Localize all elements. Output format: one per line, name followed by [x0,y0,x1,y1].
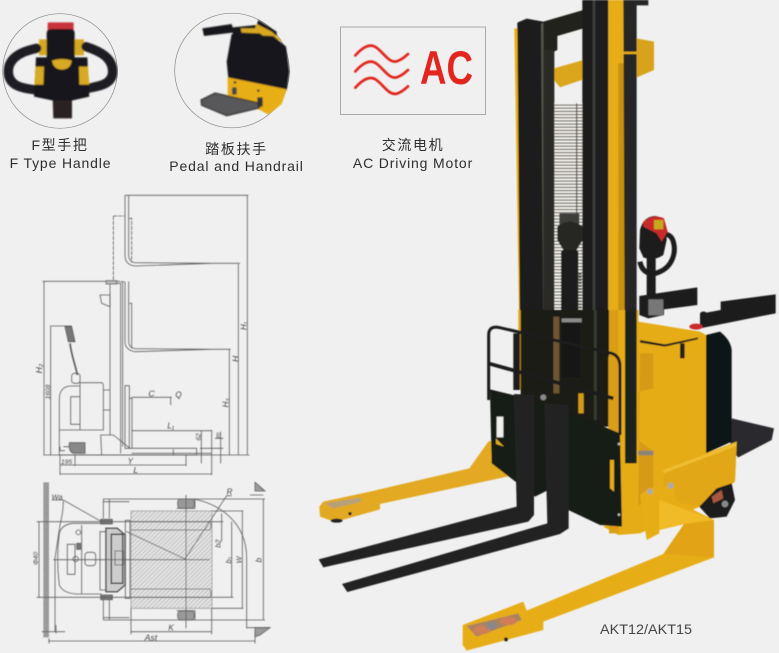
lower chassis, forks and legs [319,310,774,651]
yellow body [603,310,737,535]
near leg [463,486,714,651]
chart: side elevation technical drawing: 1608 [45,384,52,399]
chart: side elevation technical drawing: 62 [196,433,203,441]
chart: top view technical drawing: Ast [144,633,158,643]
chart: side elevation technical drawing: L [133,465,138,475]
label: F type handle: F Type Handle [10,155,111,171]
chart: side elevation technical drawing [34,195,249,475]
label: pedal and handrail [169,141,304,174]
chart: side elevation technical drawing: H [230,355,240,362]
chart: side elevation technical drawing: H₂ [34,363,44,373]
label: pedal and handrail: Pedal and Handrail [169,158,304,174]
illustration: electric stacker photo [319,0,776,651]
chart: top view technical drawing: R [227,487,233,496]
battery cover [706,332,732,453]
chart: top view technical drawing [33,482,270,643]
label: F type handle: F型手把 [32,137,88,153]
model label: AKT12/AKT15 [600,621,692,637]
chart: top view technical drawing: K [168,623,174,632]
icon: pedal and handrail photo [201,20,289,116]
far leg [319,437,510,522]
load rollers [467,613,522,637]
fork two [342,403,569,592]
chart: side elevation technical drawing: m [215,432,222,438]
panel: F type handle [3,14,117,171]
chart: side elevation technical drawing: Y [128,457,134,466]
drive wheel [699,483,735,518]
upper mast [514,0,776,333]
chart: top view technical drawing: b2 [214,540,223,548]
cylinder lower [625,310,637,463]
chart: side elevation technical drawing: H₃ [222,398,231,407]
icon: circle outline around pedal [175,13,289,128]
label: F type handle [10,137,111,171]
icon: AC badge: AC [420,41,473,94]
chart: side elevation technical drawing: L₁ [167,422,175,431]
chart: top view technical drawing: b₁ [224,556,233,563]
icon: F type handle photo [8,22,113,118]
chart: top view technical drawing: W [234,555,243,563]
chart: top view technical drawing: b [255,557,264,562]
chart: side elevation technical drawing: H₁ [240,321,249,330]
icon: AC badge [340,27,486,114]
chart: side elevation technical drawing: Q [175,390,182,399]
carriage plate [490,389,622,527]
panel: AC driving motor [340,27,486,171]
chart: top view technical drawing: Φ40 [33,552,40,565]
chart: side elevation technical drawing: C [148,389,155,399]
chart: top view technical drawing: Wa [52,493,63,502]
label: pedal and handrail: 踏板扶手 [205,141,268,157]
label: AC driving motor [353,137,473,171]
fork one [319,394,534,567]
tiller handle [639,216,674,300]
guard rails [489,327,620,435]
chart: side elevation technical drawing: 195 [61,459,72,466]
label: AC driving motor: 交流电机 [382,137,444,153]
pedal platform [730,418,774,457]
icon: circle outline around handle [3,14,117,128]
label: AC driving motor: AC Driving Motor [353,155,473,171]
panel: pedal and handrail [169,13,304,174]
mast lower [518,310,522,390]
